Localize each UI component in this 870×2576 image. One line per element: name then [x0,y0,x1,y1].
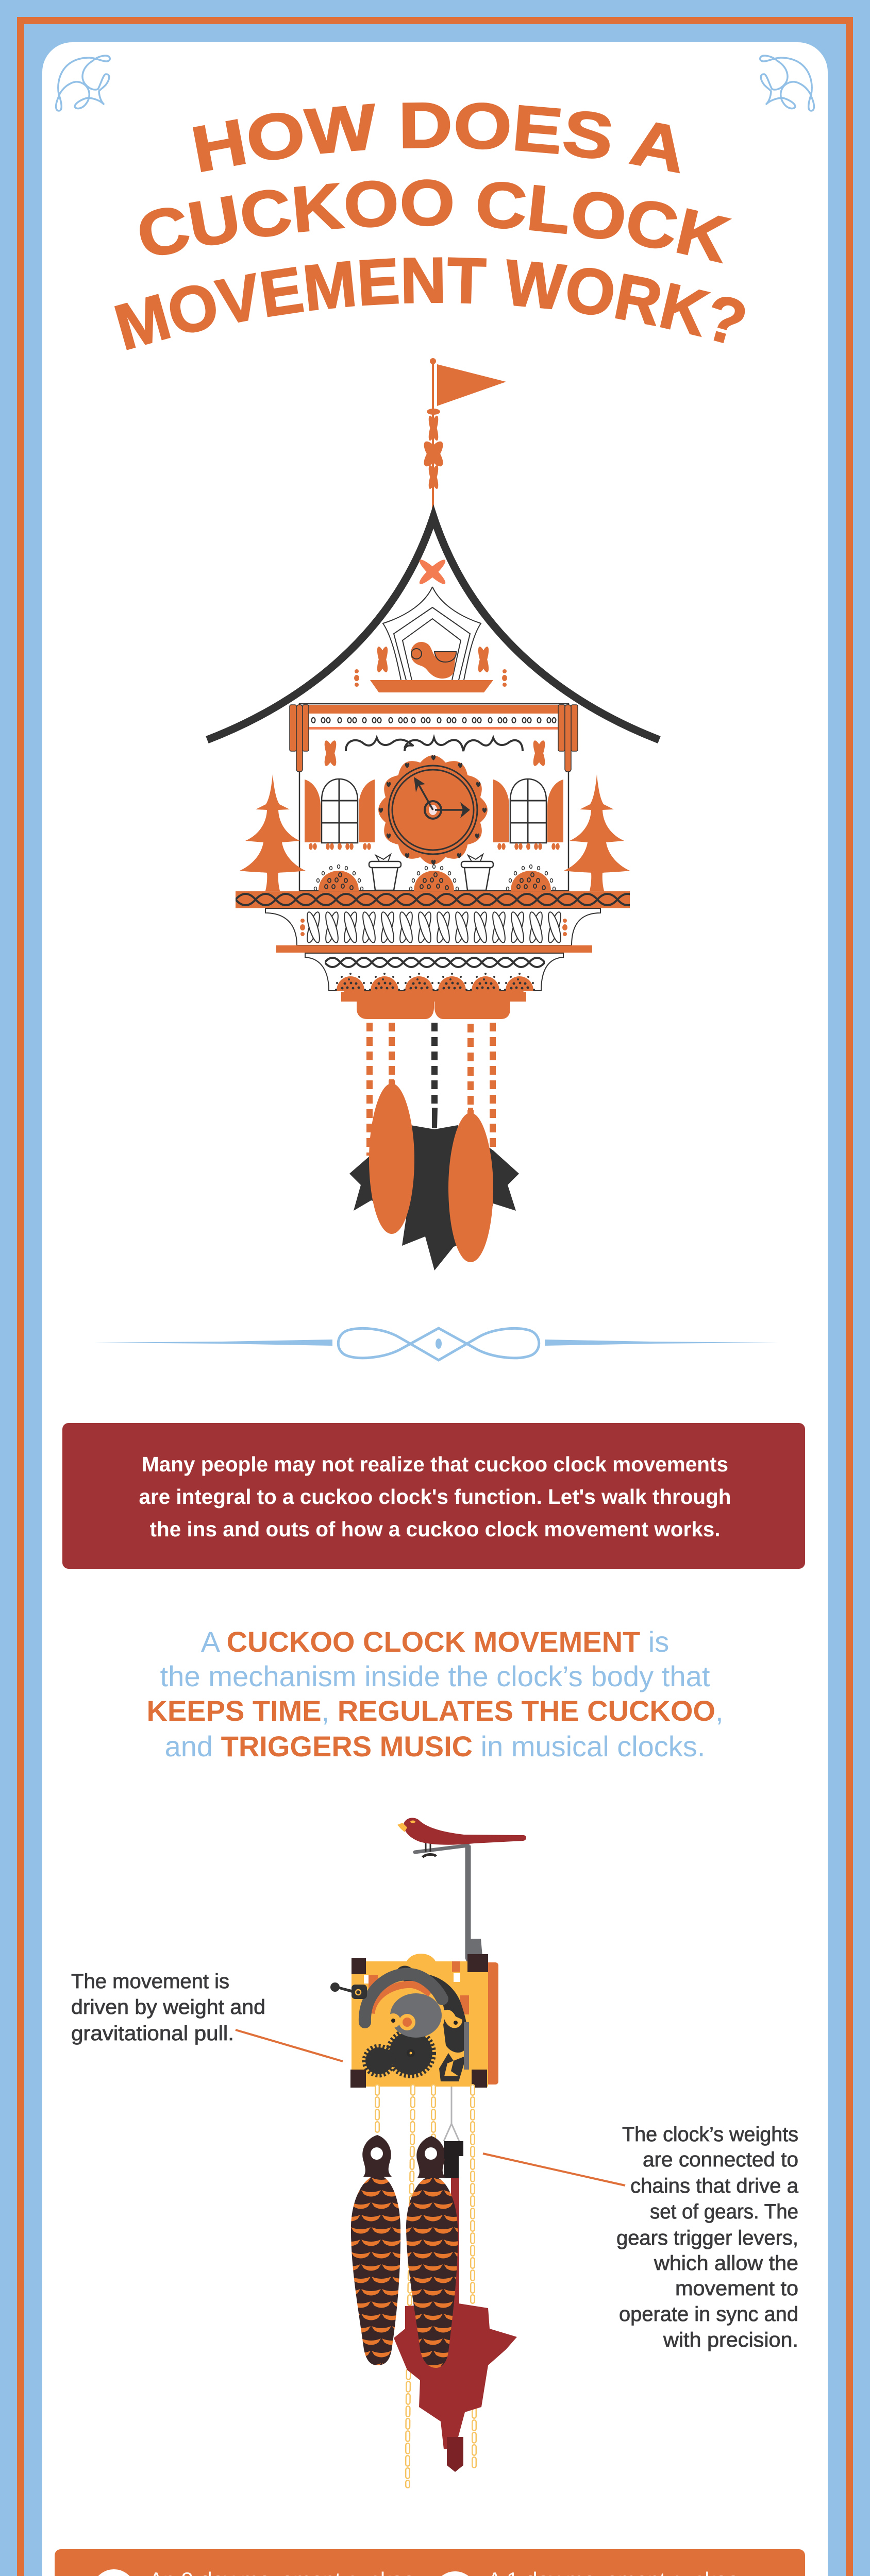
frame corners [350,1954,488,2088]
intro text: the ins and outs of how a cuckoo clock movement works. [149,1517,721,1541]
intro text [139,1452,731,1541]
wavy trim [346,738,523,751]
gable decorations [354,645,507,687]
panel: 8-day and 1-day movements [55,2549,805,2576]
corner ornament: top left [56,56,110,111]
carved shelf [265,908,600,991]
pendulum [349,1108,519,1270]
bushes [314,865,363,891]
intro text: Many people may not realize that cuckoo clock movements [142,1452,728,1476]
flag and finial [420,358,506,517]
pine cone weights [351,2135,463,2368]
callout: weight and gravity [71,1970,343,2061]
gable ornament [416,558,449,586]
definition statement [146,1625,724,1762]
corner ornament: top right [760,56,814,111]
gear mechanism arms [365,1966,468,2070]
bird [411,642,456,679]
lower decorated band [236,891,630,908]
gears [364,2030,466,2081]
title [114,102,745,350]
movement illustration [330,1818,526,2486]
callout: chains and gears: set of gears. The [650,2200,798,2223]
icon: number 1 [433,2571,477,2576]
callout: chains and gears: are connected to [643,2148,798,2171]
callout: weight and gravity: The movement is [71,1970,229,1993]
divider flourish [93,1328,779,1360]
title: MOVEMENT WORK? [114,257,745,350]
callout: chains and gears: gears trigger levers, [616,2227,798,2249]
callout: chains and gears [483,2123,799,2351]
title: CUCKOO CLOCK [140,179,732,264]
corner posts [290,705,578,772]
roof [207,515,659,740]
weights [369,1079,493,1262]
windows [305,779,375,850]
callout: chains and gears: The clock’s weights [622,2123,798,2146]
intro panel [62,1423,805,1569]
definition statement: A CUCKOO CLOCK MOVEMENT is [201,1625,669,1658]
cuckoo clock illustration [207,358,659,1270]
bird house [370,587,493,692]
flower pots [369,854,401,890]
clock body [290,704,578,891]
callout: chains and gears: operate in sync and [619,2303,798,2326]
lever and bird [397,1818,526,2067]
definition statement: KEEPS TIME, REGULATES THE CUCKOO, [146,1694,724,1727]
callout: chains and gears: chains that drive a [630,2175,799,2197]
chains [377,2087,474,2486]
callout: chains and gears: with precision. [663,2329,798,2351]
title: HOW DOES A [193,102,680,173]
winding knob [330,1982,367,1999]
orange drape [341,991,526,1019]
callout: chains and gears: movement to [675,2277,798,2300]
callout: chains and gears: which allow the [654,2252,798,2275]
definition statement: and TRIGGERS MUSIC in musical clocks. [165,1730,705,1762]
callout: weight and gravity: gravitational pull. [71,2022,234,2045]
callout: weight and gravity: driven by weight and [71,1996,265,2019]
chains and pendulum rod [370,1023,493,1156]
definition statement: the mechanism inside the clock’s body that [160,1660,710,1692]
clock face [378,755,488,865]
icon: number 8 [92,2569,136,2576]
trees [240,774,630,891]
pendulum medallion [394,2087,517,2472]
intro text: are integral to a cuckoo clock's function. Let's walk through [139,1485,731,1509]
movement frame [330,1954,498,2088]
